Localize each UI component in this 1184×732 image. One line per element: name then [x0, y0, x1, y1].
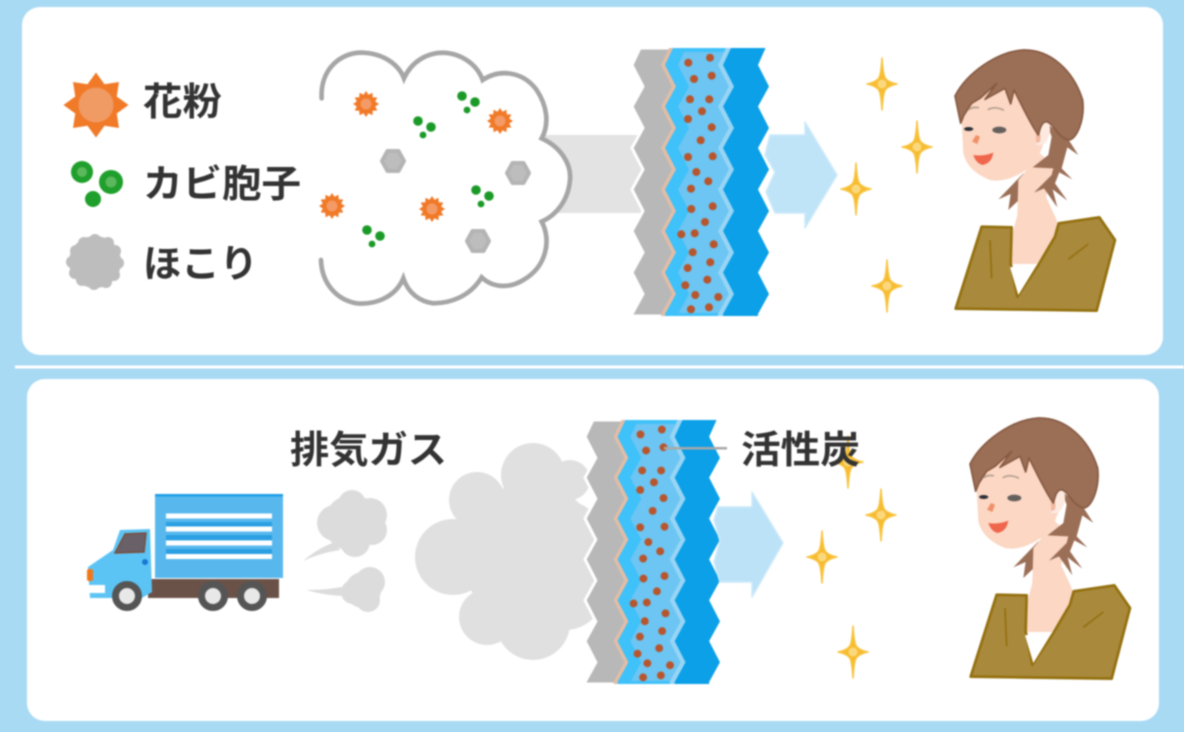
- air flow band into filter: [545, 135, 655, 213]
- panel: particle filtration: [22, 7, 1163, 355]
- truck: [87, 494, 283, 608]
- cloud outline: [321, 53, 570, 304]
- cab window: [115, 533, 146, 553]
- leader line to activated carbon: [664, 447, 727, 450]
- headlamp: [87, 585, 105, 593]
- truck chassis: [148, 579, 279, 598]
- arrow: top: [765, 122, 837, 228]
- dust particles: [382, 151, 529, 251]
- heading: exhaust gas: 排気ガス: [290, 430, 447, 472]
- icon: dust: [66, 234, 124, 290]
- label: pollen: 花粉: [143, 82, 222, 124]
- woman: bottom: [970, 418, 1130, 679]
- cargo stripes: [155, 494, 283, 559]
- wheels: [116, 584, 264, 608]
- panel: exhaust gas filtration: [27, 379, 1159, 721]
- label: dust: ほこり: [143, 244, 258, 286]
- icon: pollen: [64, 72, 128, 138]
- door handle: [142, 559, 148, 565]
- cab: [88, 529, 152, 598]
- sparkles: bottom: [807, 436, 896, 678]
- legend: [64, 72, 301, 290]
- filter: top: [632, 47, 790, 317]
- small exhaust puffs: [303, 490, 387, 612]
- cloud with particles: [319, 53, 570, 304]
- woman: top: [955, 50, 1115, 311]
- sparkles: top: [841, 58, 932, 312]
- pollen particles: [319, 91, 513, 222]
- divider: [15, 366, 1184, 368]
- filter: bottom: [585, 419, 741, 685]
- icon: mold spores: [71, 161, 123, 207]
- label: mold spores: カビ胞子: [143, 164, 301, 206]
- label: activated carbon: 活性炭: [741, 430, 860, 472]
- cargo box: [155, 494, 283, 578]
- large exhaust cloud: [415, 443, 605, 660]
- indicator lamp: [87, 569, 93, 581]
- arrow: bottom: [714, 492, 783, 597]
- spore particles: [362, 91, 494, 247]
